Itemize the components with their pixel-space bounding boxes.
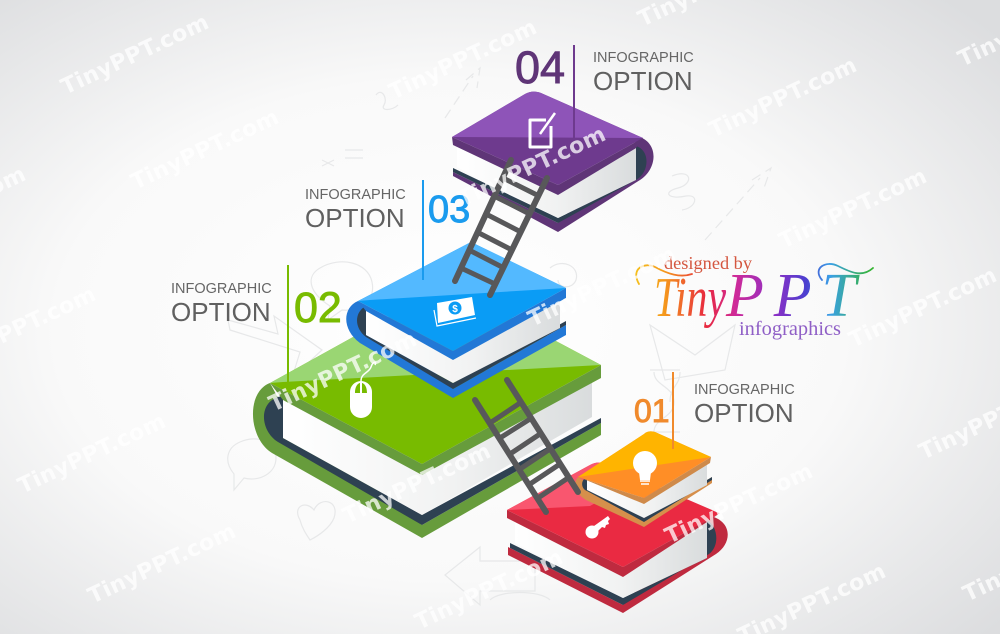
callout: option 03: INFOGRAPHIC — [305, 187, 406, 203]
purple back cover and spine — [453, 137, 654, 232]
book: blue (03) — [346, 242, 566, 398]
watermarks: TinyPPT.com — [661, 459, 817, 549]
background doodles — [228, 68, 771, 605]
green cover highlight — [270, 284, 601, 383]
green back cover and spine — [253, 383, 601, 538]
logo: designed by TinyPPT infographics — [636, 253, 873, 340]
watermarks: TinyPPT.com — [775, 164, 931, 254]
logo: designed by TinyPPT infographics: infographics — [739, 318, 841, 340]
callout: option 04: 04 — [515, 42, 565, 93]
book: green (02) — [253, 284, 601, 538]
green front cover — [270, 284, 601, 464]
watermarks: TinyPPT.com — [84, 519, 240, 609]
red back cover and spine — [508, 515, 728, 613]
ladder: blue to purple — [455, 160, 547, 295]
orange pages — [587, 460, 707, 518]
ladder: green to red — [475, 380, 578, 512]
callout: option 04: INFOGRAPHIC — [593, 50, 694, 66]
watermarks: TinyPPT.com — [339, 439, 495, 529]
watermarks: TinyPPT.com — [265, 327, 421, 417]
blue back cover and spine — [346, 301, 566, 398]
callout: option 02: INFOGRAPHIC — [171, 281, 272, 297]
purple front cover — [452, 92, 643, 185]
callout: option 01: OPTION — [694, 398, 794, 428]
watermarks: TinyPPT.com — [127, 105, 283, 195]
red inner spine — [510, 520, 716, 605]
blue cover highlight — [358, 242, 566, 301]
logo: designed by TinyPPT infographics: Tiny — [654, 267, 726, 329]
callout: option 01: INFOGRAPHIC — [694, 382, 795, 398]
orange cover edge — [578, 457, 711, 504]
watermarks: TinyPPT.com — [845, 263, 1000, 353]
orange front cover — [578, 431, 711, 498]
orange cover highlight — [578, 431, 711, 477]
red pages — [515, 520, 707, 598]
orange back cover and spine — [575, 477, 712, 527]
callout: option 01 — [634, 372, 795, 449]
red front cover — [507, 463, 720, 567]
purple cover highlight — [452, 92, 643, 138]
orange inner spine — [582, 477, 712, 522]
callout: option 02 — [171, 265, 342, 384]
blue front cover — [358, 242, 566, 351]
icon: key — [586, 516, 610, 538]
icon: tablet and pen — [530, 113, 555, 147]
book: purple (04) — [452, 92, 654, 232]
purple pages — [457, 146, 636, 218]
callout: option 04 — [515, 42, 694, 138]
callout: option 02: OPTION — [171, 297, 271, 327]
icon: light bulb — [633, 451, 657, 484]
watermarks: TinyPPT.com — [454, 122, 610, 212]
watermarks: TinyPPT.com — [705, 53, 861, 143]
green pages — [283, 378, 592, 515]
watermarks: TinyPPT.com — [57, 10, 213, 100]
logo: designed by TinyPPT infographics: designed by — [664, 253, 752, 273]
watermarks: TinyPPT.com — [14, 409, 170, 499]
watermarks: TinyPPT.com — [411, 545, 567, 634]
callout: option 03: OPTION — [305, 203, 405, 233]
purple cover edge — [452, 137, 643, 195]
icon: banknotes — [434, 297, 476, 326]
book: red (01 base) — [507, 463, 728, 613]
red cover highlight — [507, 463, 640, 510]
watermarks: TinyPPT.com — [524, 242, 680, 332]
logo: designed by TinyPPT infographics: PPT — [725, 262, 861, 330]
blue pages — [366, 298, 560, 383]
callout: option 01: 01 — [634, 393, 670, 429]
watermarks: TinyPPT.com — [385, 15, 541, 105]
blue inner spine — [357, 306, 566, 389]
icon: banknotes: $ — [452, 304, 458, 315]
blue cover edge — [358, 288, 566, 360]
callout: option 03: 03 — [428, 189, 470, 231]
callout: option 02: 02 — [294, 284, 342, 332]
callout: option 04: OPTION — [593, 66, 693, 96]
red cover edge — [507, 510, 720, 577]
book: orange (01) — [575, 431, 712, 527]
green cover edge — [270, 365, 601, 475]
purple inner spine — [453, 146, 646, 223]
green inner spine — [264, 396, 601, 525]
icon: computer mouse — [350, 362, 376, 418]
callout: option 03 — [305, 180, 470, 280]
